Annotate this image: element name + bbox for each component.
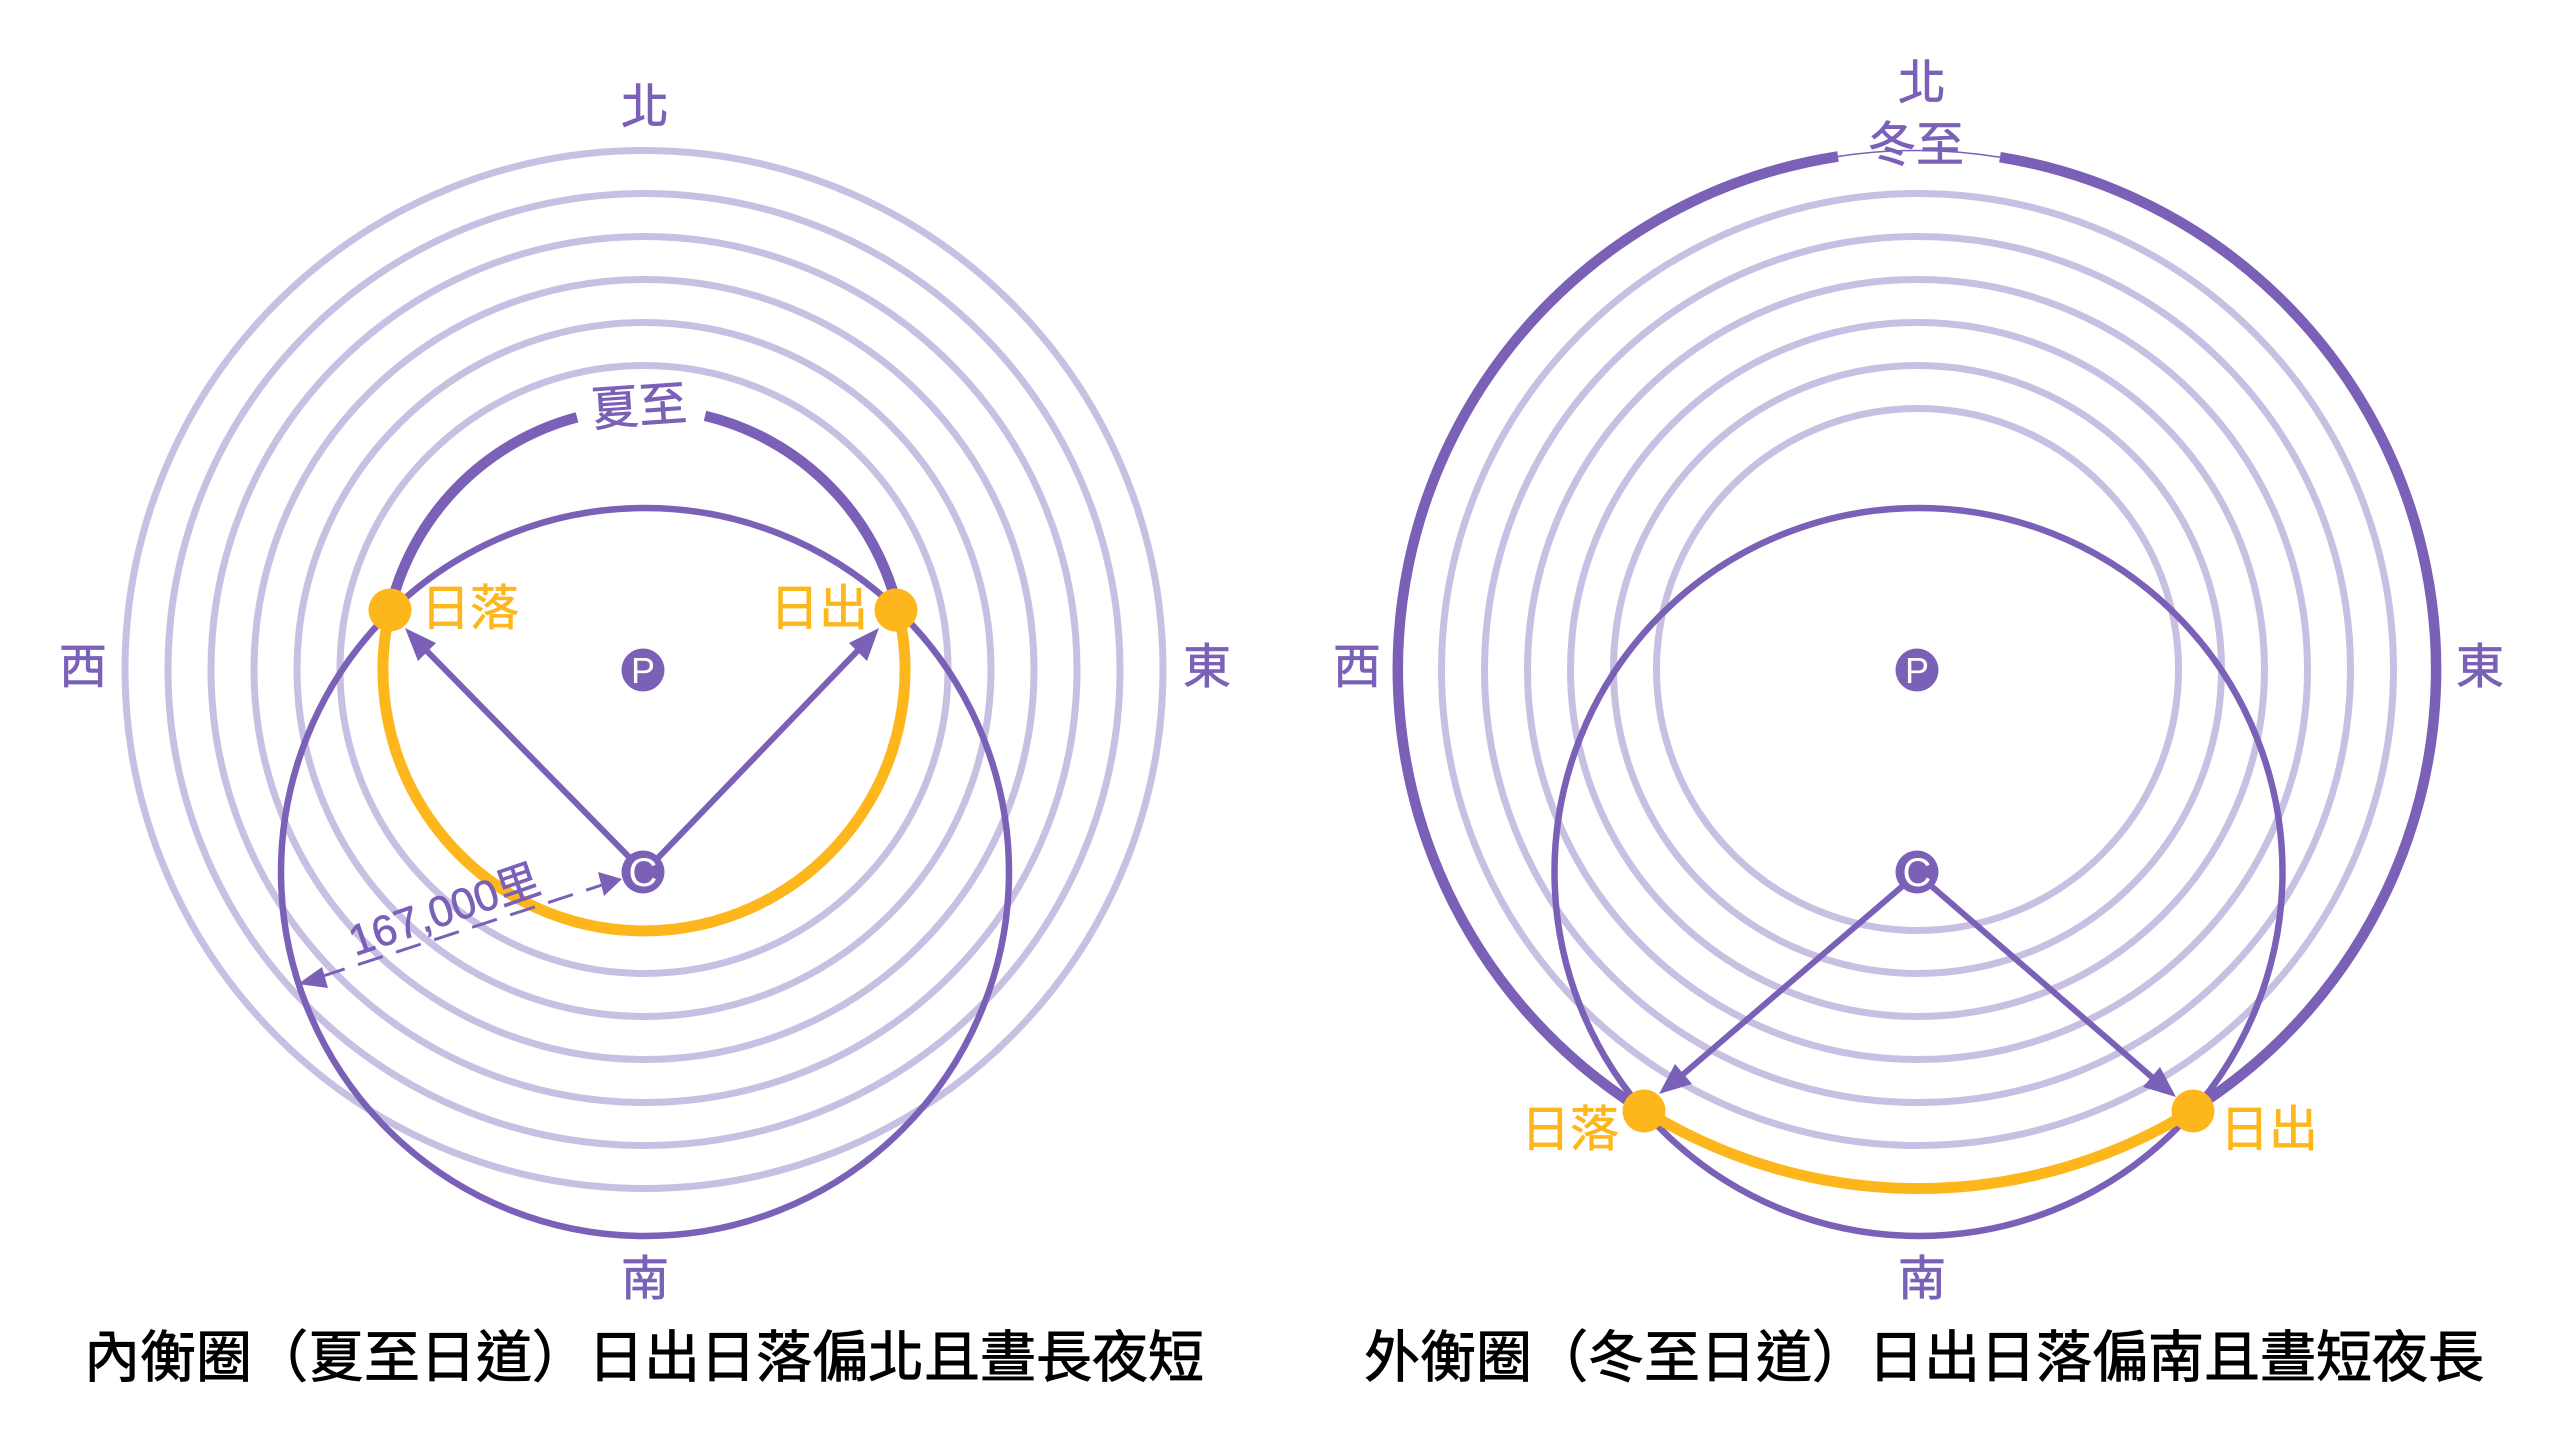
observer C — [622, 850, 664, 895]
compass west: 西 — [59, 641, 107, 694]
compass south: 南 — [621, 1253, 669, 1306]
observer C — [1896, 850, 1938, 895]
winter solstice label: 冬至 — [1868, 119, 1964, 172]
sunset label: 日落 — [421, 582, 519, 636]
sunset label: 日落 — [1521, 1103, 1619, 1157]
arrow: observer to sunrise — [1929, 884, 2176, 1097]
panel: inner circle, summer solstice — [59, 81, 1231, 1389]
panel: outer circle, winter solstice — [1333, 57, 2504, 1389]
caption left: 內衡圈（夏至日道）日出日落偏北且晝長夜短 — [84, 1326, 1204, 1389]
concentric orbit rings — [1442, 194, 2394, 1146]
dashed distance arrow — [298, 872, 622, 988]
sunrise label: 日出 — [770, 582, 868, 636]
visible sunlight circle — [281, 508, 1009, 1236]
summer solstice label: 夏至 — [589, 378, 689, 437]
sunset dot — [1622, 1090, 1666, 1132]
distance label: 167,000里 — [343, 856, 546, 966]
arrow: observer to sunset — [1659, 884, 1905, 1094]
observer C: C — [1903, 851, 1931, 895]
arrow: observer to sunset — [405, 628, 632, 860]
arrow: observer to sunrise — [656, 628, 879, 860]
compass west: 西 — [1333, 641, 1381, 694]
sunrise label: 日出 — [2220, 1103, 2318, 1157]
daylight arc of summer solstice orbit — [383, 612, 905, 931]
compass east: 東 — [1183, 641, 1231, 694]
compass north: 北 — [1898, 57, 1946, 110]
observer C: C — [629, 851, 657, 895]
pole P: P — [631, 650, 655, 691]
caption right: 外衡圈（冬至日道）日出日落偏南且晝短夜長 — [1364, 1326, 2484, 1389]
concentric orbit rings — [125, 150, 1163, 1188]
visible sunlight circle — [1554, 508, 2282, 1236]
compass north: 北 — [621, 81, 669, 134]
sunset dot — [368, 588, 412, 632]
sunrise dot — [874, 588, 918, 632]
pole P — [1896, 648, 1938, 692]
pole P: P — [1905, 650, 1929, 691]
pole P — [622, 648, 664, 692]
compass east: 東 — [2456, 641, 2504, 694]
sunrise dot — [2172, 1090, 2214, 1132]
daylight arc of winter solstice orbit — [1644, 1110, 2193, 1189]
night arc of summer solstice orbit — [390, 416, 898, 612]
compass south: 南 — [1898, 1253, 1946, 1306]
night arc of winter solstice orbit — [1398, 150, 2436, 1108]
